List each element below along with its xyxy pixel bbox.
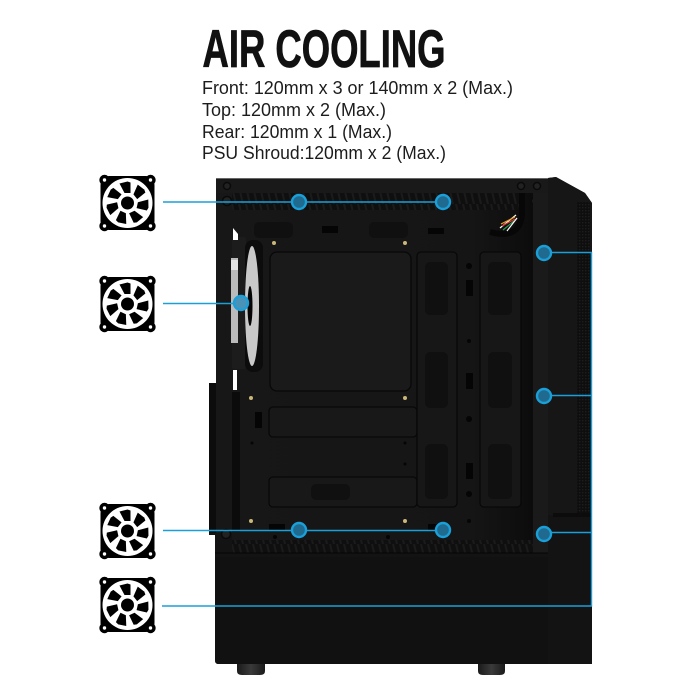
left frame (216, 178, 232, 533)
case foot right (478, 664, 505, 675)
text block: fan specifications (202, 78, 513, 163)
front panel (215, 177, 592, 553)
fan icon: top (99, 175, 156, 231)
standoffs (249, 241, 407, 523)
top vent (232, 193, 525, 210)
title: AIR COOLING (202, 20, 446, 79)
right side of shroud (548, 518, 592, 664)
text block: fan specifications: PSU Shroud:120mm x 2 (Max.) (202, 143, 446, 163)
motherboard tray (232, 193, 533, 540)
fan icon: rear (99, 276, 156, 332)
left drive bracket (209, 383, 216, 533)
top frame (216, 178, 548, 193)
case body (209, 177, 592, 664)
rear fan (231, 228, 263, 390)
case foot left (237, 664, 265, 675)
callout lines (162, 202, 592, 606)
tray clips and holes (250, 226, 473, 539)
PC case (209, 177, 592, 675)
text block: fan specifications: Front: 120mm x 3 or 140mm x 2 (Max.) (202, 78, 513, 98)
left side vent strip (232, 392, 240, 532)
tray cutouts and panels (269, 252, 521, 507)
tray slots (254, 222, 512, 500)
text block: fan specifications: Rear: 120mm x 1 (Max.) (202, 122, 392, 142)
fan icon: PSU shroud upper (99, 503, 156, 559)
cables (490, 193, 522, 234)
callout markers (234, 195, 551, 541)
PSU shroud (215, 557, 592, 664)
text block: fan specifications: Top: 120mm x 2 (Max.) (202, 100, 386, 120)
case screws (222, 182, 540, 538)
fan icon: PSU shroud lower (99, 577, 156, 633)
bottom vent (232, 540, 533, 553)
